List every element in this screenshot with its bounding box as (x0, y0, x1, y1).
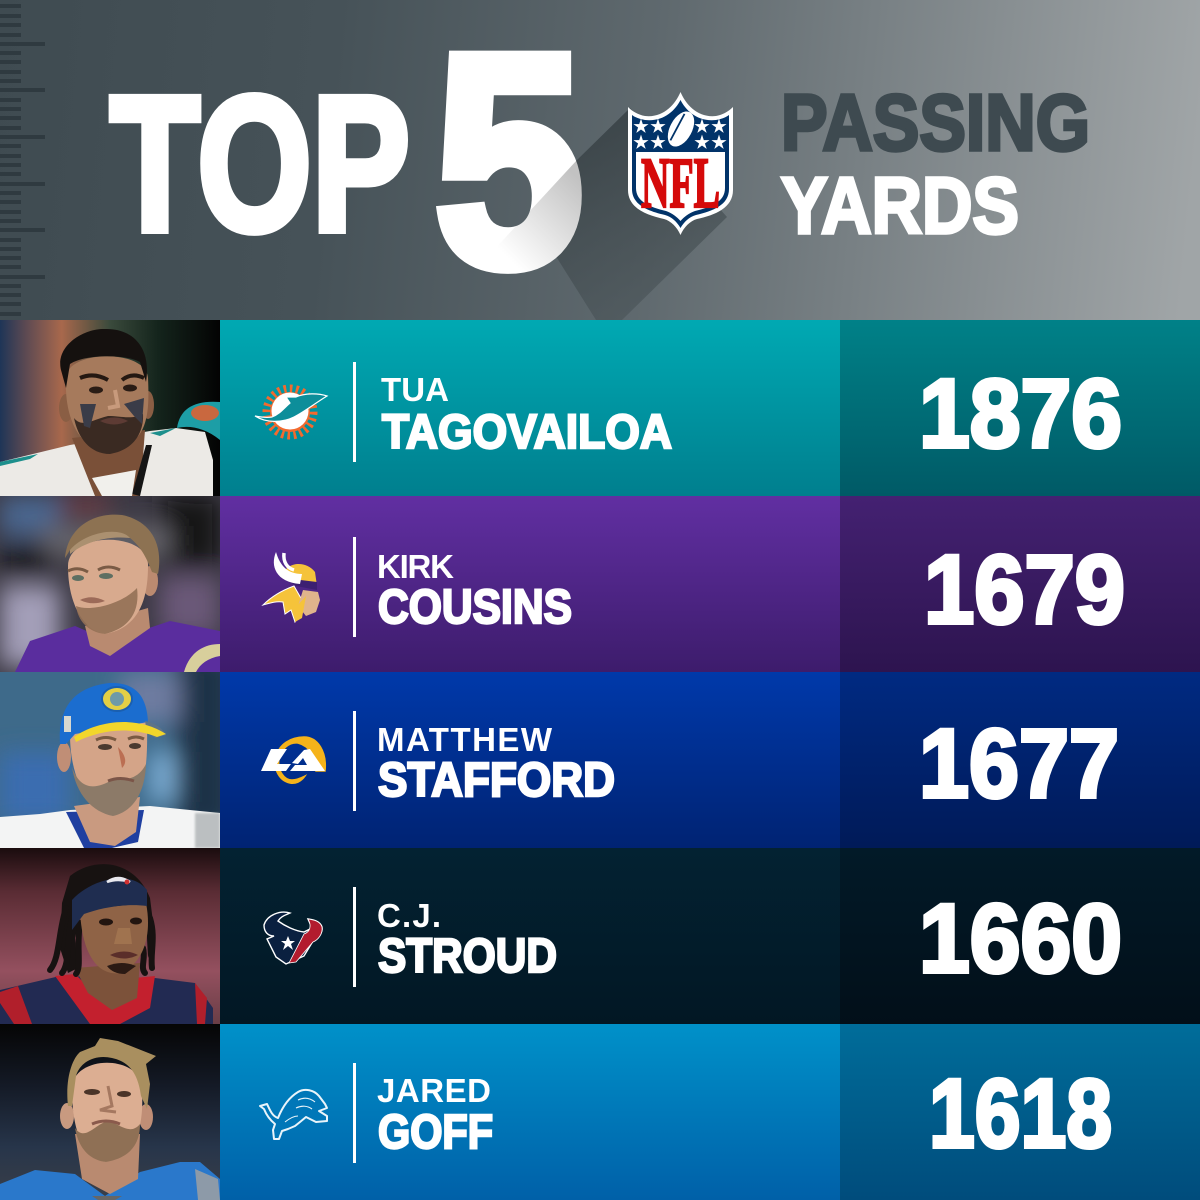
divider (353, 362, 356, 462)
NFL letters: NFL (641, 143, 720, 223)
stat: 1660: 1660 (919, 884, 1122, 993)
header banner (0, 0, 1200, 320)
title: 5: 5 (435, 0, 583, 328)
stars: ★ (650, 117, 666, 136)
yard-line ruler ticks (0, 4, 45, 316)
divider (353, 711, 356, 811)
row background (220, 1024, 1200, 1200)
player name: Kirk Cousins: COUSINS (378, 581, 572, 634)
icon: Vikings logo (263, 552, 320, 622)
panel: row 1 Tagovailoa (0, 320, 1200, 496)
icon: Lions logo (260, 1090, 327, 1139)
player name: C.J. Stroud: STROUD (378, 930, 557, 983)
icon: Texans logo (264, 912, 322, 964)
icon: Rams logo (261, 737, 325, 783)
player name: Jared Goff: GOFF (378, 1106, 493, 1159)
player name: Matthew Stafford: STAFFORD (378, 754, 615, 807)
player name: Matthew Stafford (377, 721, 615, 807)
long shadow behind logo (530, 108, 727, 320)
row background (220, 672, 1200, 848)
player photo: C.J. Stroud (0, 848, 220, 1024)
player name: Jared Goff (377, 1072, 493, 1159)
stars: ★ (711, 133, 727, 152)
player photo: Matthew Stafford (0, 672, 220, 848)
panel: row 3 Stafford (0, 672, 1200, 848)
player name: Tua Tagovailoa: TUA (381, 371, 449, 408)
stat: 1876: 1876 (919, 359, 1122, 468)
stars: ★ (633, 133, 649, 152)
stars: ★ (633, 117, 649, 136)
icon: NFL shield (628, 92, 733, 235)
stars: ★ (694, 133, 710, 152)
player name: Tua Tagovailoa (381, 371, 672, 459)
player name: Tua Tagovailoa: TAGOVAILOA (382, 406, 672, 459)
icon: Dolphins logo (255, 389, 327, 435)
divider (353, 537, 356, 637)
player name: C.J. Stroud: C.J. (377, 897, 441, 934)
player name: Jared Goff: JARED (377, 1072, 491, 1109)
player photo: Tua Tagovailoa (0, 320, 220, 496)
football (662, 107, 700, 151)
player photo: Jared Goff (0, 1024, 220, 1200)
stat: 1618: 1618 (929, 1059, 1112, 1168)
player name: Matthew Stafford: MATTHEW (377, 721, 553, 758)
divider (353, 887, 356, 987)
row background (220, 848, 1200, 1024)
title: TOP: TOP (110, 56, 410, 271)
stars: ★ (694, 117, 710, 136)
stat: 1679: 1679 (924, 535, 1125, 644)
stat: 1677: 1677 (919, 709, 1119, 818)
stars: ★ (711, 117, 727, 136)
heading: YARDS: YARDS (781, 161, 1019, 250)
panel: row 2 Cousins (0, 496, 1200, 672)
divider (353, 1063, 356, 1163)
row background (220, 320, 1200, 496)
row background (220, 496, 1200, 672)
player name: Kirk Cousins: KIRK (377, 548, 454, 585)
panel: row 5 Goff (0, 1024, 1200, 1200)
player photo: Kirk Cousins (0, 496, 220, 672)
stars: ★ (650, 133, 666, 152)
player name: Kirk Cousins (377, 548, 572, 634)
heading: PASSING: PASSING (781, 78, 1090, 167)
panel: row 4 Stroud (0, 848, 1200, 1024)
stars (633, 117, 727, 152)
player name: C.J. Stroud (377, 897, 557, 983)
